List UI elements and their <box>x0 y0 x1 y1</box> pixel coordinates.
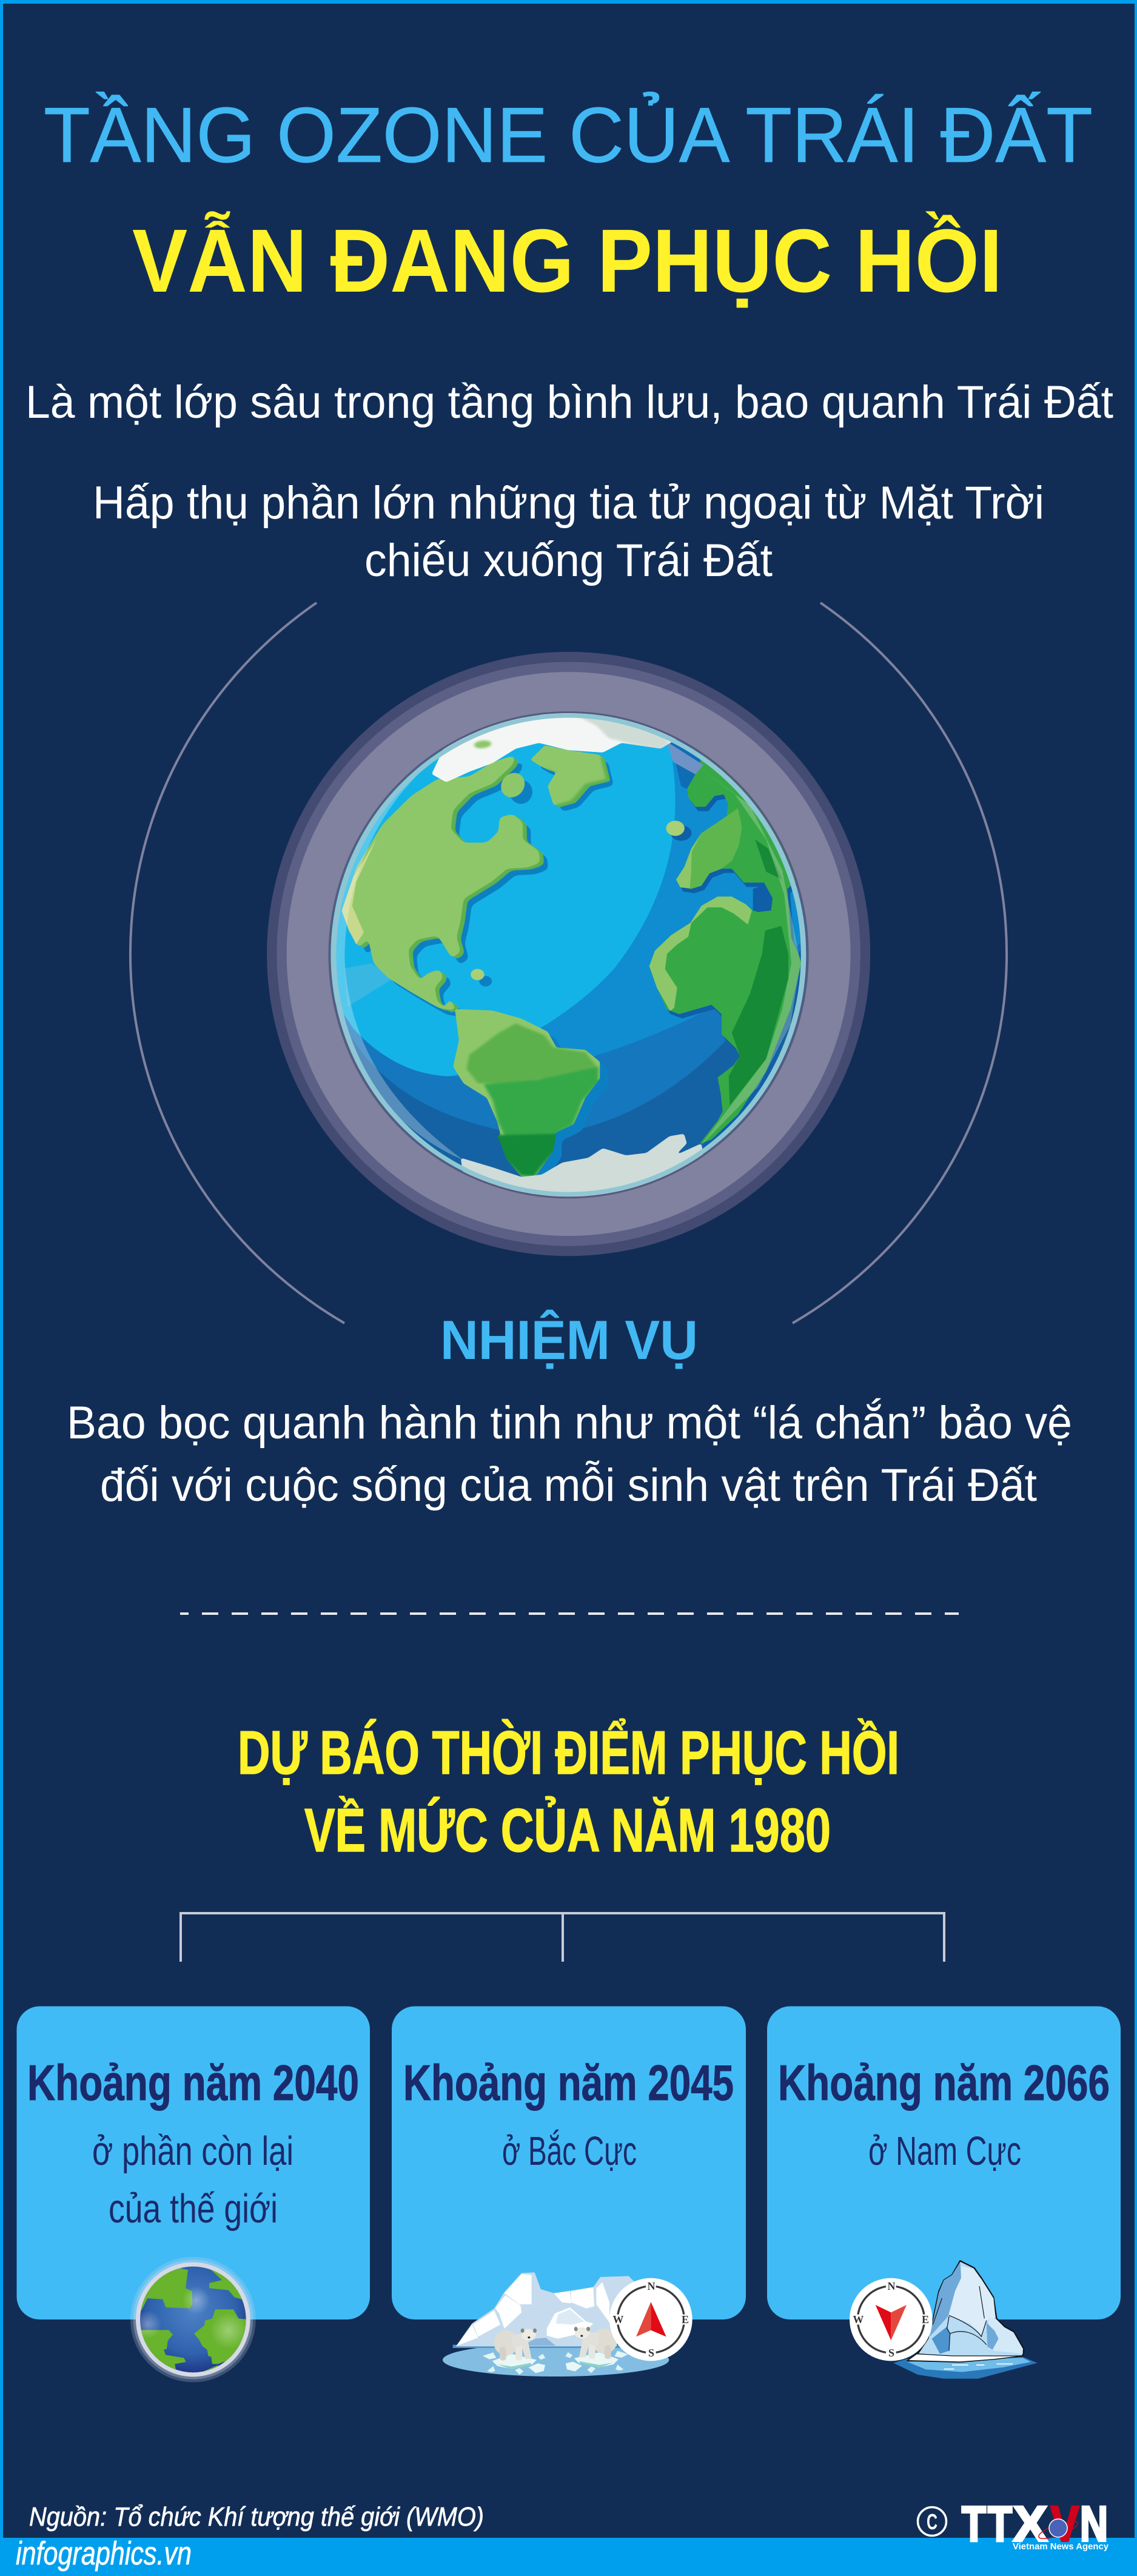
intro text: layer description: Là một lớp sâu trong tầng bình lưu, bao quanh Trái Đất <box>25 377 1113 428</box>
compass south <box>850 2278 933 2361</box>
logo: TTXVN: Vietnam News Agency <box>1013 2541 1109 2552</box>
panel: 2066 Antarctic <box>767 2006 1121 2319</box>
island shadow <box>671 825 691 840</box>
edge gloss on land <box>697 766 800 1147</box>
icon: small globe <box>130 2257 256 2382</box>
icon: Arctic iceberg and polar bears <box>443 2272 693 2376</box>
title line 1: TẦNG OZONE CỦA TRÁI ĐẤT <box>44 91 1093 179</box>
outer shield arcs <box>130 603 1007 1323</box>
water <box>443 2343 669 2376</box>
greenland and islands <box>471 745 685 981</box>
panel: 2045 Arctic <box>392 2006 746 2319</box>
atmosphere gloss <box>324 757 463 1160</box>
compass north: E <box>682 2313 689 2326</box>
oceans <box>318 709 817 1203</box>
east shadow <box>668 794 799 1040</box>
logo: TTXVN: T <box>962 2497 986 2552</box>
logo: TTXVN: T <box>988 2497 1012 2552</box>
card heading: Khoảng năm 2040 <box>27 2054 359 2111</box>
polar bears <box>483 2327 628 2375</box>
title line 2: VẪN ĐANG PHỤC HỒI <box>132 211 1002 311</box>
east land <box>649 753 808 1144</box>
iceberg <box>908 2261 1024 2362</box>
ozone ring <box>267 652 870 1256</box>
icon: Antarctic iceberg <box>850 2261 1038 2379</box>
copyright mark: C <box>927 2509 937 2534</box>
iceberg <box>456 2272 635 2346</box>
intro text: UV absorption: chiếu xuống Trái Đất <box>364 535 773 586</box>
logo: TTXVN: X <box>1013 2497 1047 2552</box>
mission text <box>67 1397 1072 1511</box>
compass north <box>609 2278 693 2361</box>
top right haze <box>667 742 703 774</box>
copyright mark <box>918 2507 946 2536</box>
panel: 2040 rest of world <box>17 2006 370 2319</box>
compass south: E <box>922 2313 929 2326</box>
compass south: N <box>887 2280 895 2292</box>
forecast heading <box>238 1719 899 1865</box>
deep green interior <box>755 839 782 879</box>
earth globe <box>330 713 807 1197</box>
atmosphere rim <box>334 716 803 1194</box>
site name: infographics.vn <box>16 2535 192 2572</box>
forecast heading: VỀ MỨC CỦA NĂM 1980 <box>304 1797 831 1865</box>
mission text: đối với cuộc sống của mỗi sinh vật trên Trái Đất <box>100 1460 1037 1511</box>
south polar ice <box>461 1134 713 1218</box>
water <box>893 2357 1038 2379</box>
card text: ở phần còn lại <box>92 2128 293 2174</box>
europe light <box>676 808 742 889</box>
intro text: UV absorption: Hấp thụ phần lớn những tia tử ngoại từ Mặt Trời <box>93 477 1044 529</box>
compass north: N <box>647 2280 655 2292</box>
africa light coast <box>649 896 752 1011</box>
footer band <box>0 2538 1137 2576</box>
card text: ở Bắc Cực <box>502 2128 637 2174</box>
north america <box>346 757 544 1013</box>
card heading: Khoảng năm 2045 <box>403 2054 734 2111</box>
small globe continents <box>138 2266 249 2373</box>
south america <box>453 1009 600 1177</box>
compass north: W <box>612 2313 623 2326</box>
logo: TTXVN: N <box>1080 2497 1108 2552</box>
compass north: S <box>648 2347 654 2359</box>
icon: earth inside ozone ring <box>267 652 870 1256</box>
card text: của thế giới <box>109 2186 278 2232</box>
connector bracket <box>181 1913 944 1962</box>
compass south: W <box>853 2313 864 2326</box>
mediterranean east end <box>753 887 773 912</box>
continent shadows <box>350 752 614 1184</box>
compass south: S <box>888 2347 894 2359</box>
forecast heading: DỰ BÁO THỜI ĐIỂM PHỤC HỒI <box>238 1719 899 1787</box>
north polar ice <box>432 705 678 782</box>
north america pale edge <box>342 839 377 944</box>
card text <box>92 2128 293 2232</box>
mission text: Bao bọc quanh hành tinh như một “lá chắn” bảo vệ <box>67 1397 1072 1449</box>
intro text: UV absorption <box>93 477 1044 586</box>
source note: Nguồn: Tổ chức Khí tượng thế giới (WMO) <box>29 2502 484 2532</box>
europe, asia and africa <box>649 742 811 1149</box>
logo: TTXVN: V <box>1051 2497 1079 2552</box>
logo: TTXVN <box>962 2497 1109 2552</box>
heading: mission: NHIỆM VỤ <box>440 1309 698 1371</box>
card text: ở Nam Cực <box>868 2128 1021 2174</box>
